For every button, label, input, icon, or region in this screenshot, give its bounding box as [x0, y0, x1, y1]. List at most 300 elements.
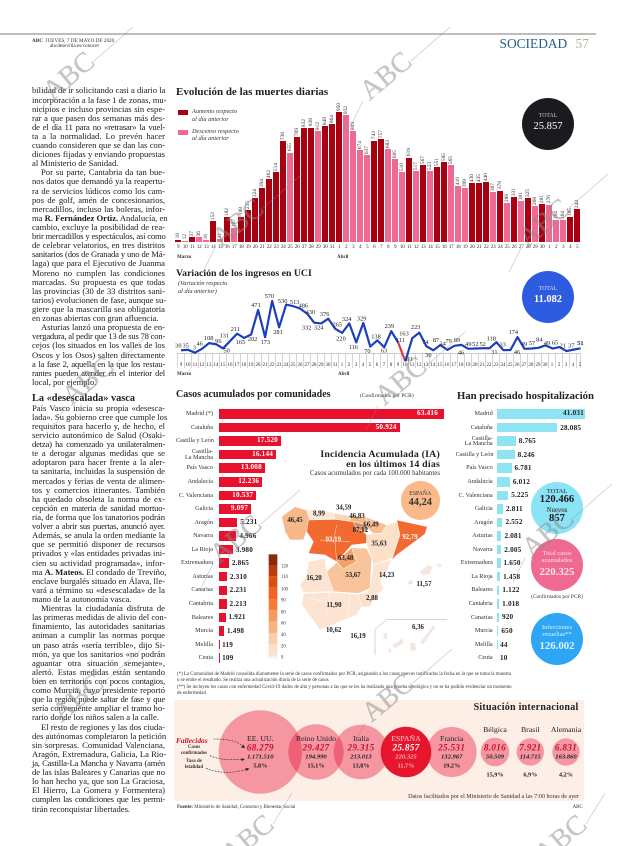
bar chart: cases by region: 10.537: [232, 491, 253, 499]
map values: 34,59: [336, 504, 352, 512]
article text column, part two: cien su actividad programada», infor-: [32, 558, 165, 568]
bar chart: daily deaths: 567: [420, 156, 426, 164]
dateline: abcdesevilla.es/conocer: [50, 43, 99, 49]
bubble labels: 50.509: [486, 754, 505, 760]
article text column, part two: cumplen las condiciones que les permi-: [32, 794, 165, 804]
article text column, part two: alertó. Estas medidas están sentando: [32, 667, 165, 677]
dateline: ABC JUEVES, 7 DE MAYO DE 2020: [32, 38, 114, 44]
ICU value labels: 486: [299, 302, 308, 310]
bar chart: daily deaths: 757: [378, 130, 384, 138]
bar chart: cases by region: 63.416: [417, 409, 438, 417]
bar chart: cases by region: Andalucía: [188, 478, 213, 485]
bar chart: daily deaths: 812: [315, 122, 321, 130]
bubble labels: 6.831: [555, 743, 577, 753]
date axis: ICU admissions: 30: [326, 363, 330, 368]
bar chart: daily deaths: 244: [574, 200, 580, 208]
legend: deceased: Fallecidos: [176, 736, 208, 744]
bar chart: daily deaths: 655: [287, 143, 293, 152]
ICU value labels: 223: [411, 324, 420, 331]
bar chart: daily deaths: 164: [560, 211, 566, 219]
article text column, part one: local, por ejemplo.: [32, 377, 96, 387]
ICU value labels: 52: [472, 341, 478, 348]
date axis: daily deaths: 19: [246, 245, 251, 250]
date axis: daily deaths: 4: [359, 245, 362, 250]
panel: international situation: [174, 700, 584, 801]
date axis: daily deaths: 28: [526, 245, 531, 250]
date axis: ICU admissions: 6: [376, 363, 378, 368]
map values: [287, 504, 432, 640]
date axis: daily deaths: 17: [449, 245, 454, 250]
map values: 10,62: [326, 627, 342, 634]
article text column, part two: te a derogar algunas medidas que se: [32, 448, 165, 458]
date axis: ICU admissions: 17: [452, 363, 456, 368]
article text column, part one: de celebrar velatorios, en tres distritos: [32, 240, 165, 250]
bar chart: daily deaths: 152: [210, 212, 216, 220]
bubble labels: Alemania: [551, 725, 582, 734]
date axis: ICU admissions: 24: [501, 363, 505, 368]
article text column, part two: cepción en materia de sanidad mortuo-: [32, 503, 165, 513]
article text column, part one: sanitarios (dos de Granada y uno de Má-: [32, 249, 165, 259]
map values: 92,79: [402, 534, 418, 541]
legend: daily deaths: [178, 108, 239, 142]
ICU value labels: 211: [231, 326, 240, 333]
ICU value labels: 65: [552, 340, 558, 346]
article text column, part two: Aragón, Extremadura, Galicia, La Rio-: [32, 749, 166, 759]
ICU value labels: 3: [193, 344, 196, 352]
bar chart: daily deaths: 288: [504, 194, 510, 202]
bar chart: hospitalised by region: La Rioja: [471, 573, 493, 580]
footnotes: [177, 671, 512, 696]
date axis: daily deaths: 11: [190, 245, 195, 250]
bubble labels: 1.171.510: [247, 754, 274, 760]
date axis: ICU admissions: 15: [438, 363, 442, 368]
bar chart: daily deaths: 674: [357, 141, 363, 149]
bar chart: daily deaths: 107: [231, 219, 237, 227]
date axis: daily deaths: 20: [253, 245, 258, 250]
ABC watermarks: ABC: [369, 351, 433, 412]
credit: ABC: [573, 804, 583, 810]
bar chart: cases by region: Murcia: [195, 627, 213, 634]
bar chart: cases by region: 4.966: [239, 532, 256, 540]
ICU value labels: 220: [336, 336, 346, 342]
date axis: daily deaths: 7: [380, 245, 383, 250]
total hospitalised circle: TOTAL: [547, 488, 567, 494]
bar chart: cases by region: 13.008: [241, 463, 262, 471]
bar chart: daily deaths: 864: [329, 115, 335, 123]
date axis: daily deaths: 8: [387, 245, 390, 250]
ICU value labels: 63: [381, 348, 387, 354]
map title: [320, 449, 440, 470]
map title: en los últimos 14 días: [346, 459, 440, 470]
ABC watermarks: ABC: [356, 668, 420, 729]
date axis: ICU admissions: 17: [235, 363, 239, 368]
France bubble: [427, 727, 477, 777]
date axis: ICU admissions: 16: [228, 363, 232, 368]
colour scale: 110: [281, 575, 288, 580]
article text column, part one: incorporación a la fase 1 de zonas, mu-: [32, 94, 167, 104]
bubble labels: 25.531: [437, 743, 465, 753]
ABC watermarks: ABC: [206, 193, 270, 254]
article text column, part two: mano de la autonomía vasca.: [32, 594, 132, 604]
legend: fatality rate: Tasa de: [186, 758, 202, 764]
month labels: daily deaths: Marzo: [177, 254, 191, 260]
colour scale: 0: [281, 656, 284, 661]
total hospitalised circle: [531, 482, 583, 534]
total accumulated cases circle: 220.325: [539, 566, 575, 578]
date axis: daily deaths: 5: [366, 245, 369, 250]
heading: cumulative cases: Casos acumulados por comunidades: [176, 388, 331, 400]
bar chart: cases by region: Canarias: [191, 586, 213, 593]
ICU value labels: 324: [342, 316, 352, 323]
date axis: daily deaths: 21: [260, 245, 265, 250]
article text column, part one: a la fase 2, aquella en la que los restau-: [32, 359, 165, 369]
date axis: daily deaths: 14: [211, 245, 216, 250]
article text column, part two: animan a cumplir las normas porque: [32, 630, 165, 640]
date axis: daily deaths: 19: [463, 245, 468, 250]
date axis: ICU admissions: 10: [403, 363, 407, 368]
date axis: daily deaths: 5: [576, 245, 579, 250]
ICU value labels: 74: [422, 339, 429, 346]
date axis: daily deaths: 15: [435, 245, 440, 250]
article text column, part two: [32, 403, 167, 814]
date axis: ICU admissions: 26: [515, 363, 519, 368]
date axis: ICU admissions: 24: [284, 363, 288, 368]
date axis: daily deaths: 28: [309, 245, 314, 250]
date axis: ICU admissions: 11: [410, 363, 414, 368]
date axis: ICU admissions: 19: [249, 363, 253, 368]
ABC watermarks: ABC: [204, 509, 268, 570]
ICU value labels: 31: [491, 349, 497, 356]
bar chart: cases by region: 2.865: [232, 559, 249, 567]
article text column, part one: de el día 11 para no «retrasar» la vuel-: [32, 122, 165, 132]
bubble labels: 15,1%: [307, 762, 325, 770]
article text column, part two: que la región puede saltar de fase y que: [32, 694, 165, 704]
bar chart: daily deaths: 440: [483, 173, 489, 181]
Spain incidence circle: 44,24: [409, 497, 432, 508]
date axis: ICU admissions: 7: [383, 363, 385, 368]
ICU value labels: 174: [509, 329, 519, 336]
total ICU circle: 11.082: [534, 294, 562, 305]
ICU value labels: 30: [425, 352, 431, 359]
article text column, part one: brir mercadillos y espectáculos, así como: [32, 231, 166, 241]
bar chart: hospitalised by region: 10: [500, 654, 508, 662]
date axis: daily deaths: 25: [288, 245, 293, 250]
bar chart: hospitalised by region: 28.085: [560, 424, 581, 432]
article text column, part two: tirán reconquistar libertades.: [32, 804, 130, 814]
total accumulated cases circle: Total casos: [543, 550, 571, 557]
article text column, part two: detza) ha comenzado ya unilateralmen-: [32, 439, 165, 449]
bar chart: hospitalised by region: Asturias: [472, 532, 493, 539]
date axis: ICU admissions: 18: [242, 363, 246, 368]
colour scale: 40: [281, 633, 286, 638]
bar chart: cases by region: 119: [222, 641, 233, 649]
article text column, part one: rar a que pasen dos semanas más des-: [32, 113, 165, 123]
article text column, part two: enclave burgalés situado en Álava, lle-: [32, 576, 165, 586]
bar chart: daily deaths: [175, 103, 580, 242]
bar chart: hospitalised by region: 920: [502, 613, 513, 621]
date axis: daily deaths: 24: [498, 245, 503, 250]
ICU value labels: 46: [458, 350, 464, 356]
bar chart: cases by region: Baleares: [192, 614, 213, 621]
date axis: daily deaths: 27: [519, 245, 524, 250]
ICU value labels: [175, 293, 583, 363]
bar chart: daily deaths: 565: [448, 156, 454, 164]
map values: 35,63: [371, 540, 387, 548]
article text column, part one: Oscos y los Osos) salten directamente: [32, 350, 165, 360]
date axis: daily deaths: 1: [548, 245, 551, 250]
article text column, part two: lo han hecho ya, que son La Graciosa,: [32, 776, 165, 786]
bar chart: daily deaths: 462: [266, 170, 272, 178]
bar chart: hospitalised by region: 1.122: [502, 586, 520, 594]
map values: 11,90: [326, 602, 342, 609]
colour scale: 120: [281, 565, 289, 570]
bar chart: cases by region: Extremadura: [181, 559, 213, 566]
bar chart: cases by region: Castilla-: [192, 448, 213, 455]
date axis: daily deaths: 4: [569, 245, 572, 250]
ABC watermarks: ABC: [516, 503, 580, 564]
Belgium bubble: [481, 738, 509, 766]
bar chart: cases by region: Melilla: [195, 641, 213, 648]
article text column, part one: Asturias lanzó una propuesta de en-: [41, 322, 165, 332]
map subtitle: Casos acumulados por cada 100.000 habitantes: [310, 470, 440, 477]
article text column, part two: País Vasco inicia su propia «desesca-: [32, 403, 165, 413]
ICU value labels: 87: [433, 337, 439, 344]
article text column, part two: aguantar otra situación semejante»,: [32, 658, 165, 668]
article text column, part one: en zonas abiertas con gran afluencia.: [32, 313, 158, 323]
date axis: ICU admissions: 12: [200, 363, 204, 368]
date axis: ICU admissions: 20: [256, 363, 260, 368]
bar chart: daily deaths: 301: [518, 192, 524, 200]
article text column, part two: des autónomas completaron la petición: [32, 731, 166, 741]
article text column, part one: ma R. Fernández Ortiz. Andalucía, en: [32, 213, 168, 223]
bar chart: daily deaths: 37: [189, 231, 195, 236]
ICU value labels: 108: [204, 335, 213, 342]
arrow heads: [241, 744, 250, 771]
bar chart: hospitalised by region: 6.781: [515, 464, 532, 472]
article text column, part one: ta a la normalidad. Lo prevén hacer: [32, 131, 165, 141]
bar chart: hospitalised by region: Castilla y León: [456, 451, 494, 458]
date axis: daily deaths: 13: [421, 245, 426, 250]
bar chart: daily deaths: 950: [336, 103, 342, 111]
date axis: ICU admissions: 9: [180, 363, 182, 368]
header rule: [0, 33, 596, 35]
date axis: ICU admissions: 23: [494, 363, 498, 368]
article text column, part two: servicio autonómico de Salud (Osaki-: [32, 430, 165, 440]
article text column, part two: volver a abrir sus puertas, anunció ayer.: [32, 521, 165, 531]
date axis: daily deaths: 2: [555, 245, 558, 250]
bubble labels: 5,8%: [253, 762, 267, 770]
date axis: daily deaths: 1: [338, 245, 341, 250]
date axis: daily deaths: 10: [183, 245, 188, 250]
ICU value labels: 138: [371, 334, 381, 340]
date axis: daily deaths: 30: [540, 245, 545, 250]
date axis: ICU admissions: 27: [305, 363, 309, 368]
ICU value labels: 570: [265, 293, 274, 300]
bar chart: cases by region: 9.097: [231, 504, 248, 512]
bar chart: hospitalised by region: La Mancha: [465, 440, 493, 447]
legend: confirmed cases: confirmados: [181, 751, 207, 756]
date axis: daily deaths: 12: [414, 245, 419, 250]
ICU value labels: 265: [333, 322, 342, 328]
ICU value labels: 116: [349, 344, 358, 351]
date axis: daily deaths: 29: [533, 245, 538, 250]
ICU value labels: 49: [465, 341, 471, 348]
bar chart: hospitalised by region: 1.458: [503, 573, 520, 581]
colour scale: [269, 554, 289, 661]
bar chart: hospitalised by region: Castilla-: [472, 434, 493, 442]
total deaths circle: TOTAL: [539, 113, 557, 119]
colour scale: 80: [281, 610, 286, 615]
bar chart: daily deaths: 235: [245, 201, 251, 209]
date axis: daily deaths: 9: [177, 245, 180, 250]
US bubble: [219, 710, 302, 794]
bubble labels: 68.279: [247, 743, 274, 753]
bar chart: daily deaths: 276: [546, 195, 552, 204]
total ICU circle: TOTAL: [539, 286, 557, 292]
date axis: daily deaths: 16: [442, 245, 447, 250]
bar chart: daily deaths: 551: [434, 158, 440, 166]
bar chart: hospitalised by region: Galicia: [475, 505, 493, 512]
bar chart: daily deaths: 324: [252, 189, 258, 197]
legend: decrease: al día anterior: [192, 135, 229, 142]
legend: fatality rate: [185, 758, 204, 770]
ICU value labels: 281: [273, 329, 283, 336]
bar chart: hospitalised by region: C. Valenciana: [458, 492, 493, 499]
date axis: daily deaths: 24: [281, 245, 286, 250]
bar chart: hospitalised by region: 2.081: [504, 532, 522, 540]
map values: 11,57: [416, 581, 432, 588]
date axis: ICU admissions: 5: [369, 363, 371, 368]
bar chart: daily deaths: 18: [175, 233, 181, 239]
article text column, part two: privados y «las entidades privadas ini-: [32, 548, 165, 558]
bar chart: hospitalised by region: Andalucía: [467, 478, 493, 485]
article text column, part two: El resto de regiones y las dos ciuda-: [41, 722, 165, 732]
bar chart: daily deaths: 182: [224, 208, 230, 216]
chart axis: [177, 354, 581, 368]
bar chart: daily deaths: 523: [427, 162, 433, 170]
bar chart: cases by region: Ceuta: [199, 654, 213, 661]
bar chart: daily deaths: 394: [259, 179, 265, 187]
ICU value labels: 332: [302, 324, 311, 332]
bar chart: cases by region: 12.236: [238, 477, 259, 485]
bar chart: cases by region: La Rioja: [192, 546, 213, 553]
bar chart: daily deaths: 12: [182, 234, 188, 240]
date axis: ICU admissions: 29: [319, 363, 323, 368]
date axis: ICU admissions: 25: [291, 363, 295, 368]
date axis: ICU admissions: [180, 362, 581, 368]
bar chart: daily deaths: 619: [406, 148, 412, 156]
article text column, part one: rantes pueden atender en el interior del: [32, 368, 165, 378]
month labels: ICU admissions: [177, 372, 350, 377]
bar chart: daily deaths: 21: [217, 233, 223, 238]
article text column, part one: las provincias (30 de 33 distritos sani-: [32, 286, 165, 296]
article text column, part one: giere que la mascarilla sea obligatoria: [32, 304, 165, 314]
article text column, part two: ha quedado obsoleta la norma de ex-: [32, 494, 165, 504]
bar chart: daily deaths: 325: [525, 189, 531, 197]
ICU value labels: 513: [290, 299, 299, 306]
bar chart: hospitalised by region: [456, 409, 585, 662]
date axis: ICU admissions: 14: [431, 363, 435, 368]
article text column, part two: las primeras medidas de alivio del con-: [32, 612, 167, 622]
bar chart: daily deaths: 164: [553, 211, 559, 219]
total hospitalised circle: Nuevos: [547, 506, 567, 514]
footnotes: o se emite el resultado. Se realiza una actualización diaria de la serie de casos (**) Se incluyen los casos con enfermedad Covid-19 dados de alta y personas a las que se les ha realizado una prueba serológica y no se ha podido evidenciar un momento: [177, 678, 512, 690]
bar chart: hospitalised by region: 1.018: [502, 600, 519, 608]
bar chart: daily deaths: 430: [469, 174, 475, 182]
choropleth map of Spain: [268, 504, 447, 661]
ICU value labels: 49: [544, 340, 550, 347]
ICU value labels: 96: [215, 338, 221, 345]
date axis: ICU admissions: 20: [473, 363, 477, 368]
ICU value labels: 51: [577, 340, 583, 347]
bar chart: hospitalised by region: Cataluña: [471, 424, 493, 431]
date axis: ICU admissions: 15: [221, 363, 225, 368]
bar chart: daily deaths: 769: [294, 128, 300, 136]
bar chart: hospitalised by region: 6.012: [513, 478, 530, 486]
bubble labels: 6,9%: [523, 772, 537, 778]
date axis: ICU admissions: 27: [522, 363, 526, 368]
date axis: ICU admissions: 28: [529, 363, 533, 368]
ICU value labels: 530: [278, 298, 287, 305]
ICU value labels: 46: [197, 340, 203, 348]
bar chart: cases by region: Castilla y León: [176, 437, 214, 444]
date axis: ICU admissions: 2: [348, 363, 350, 368]
ICU value labels: 111: [396, 337, 405, 344]
bar chart: daily deaths: 268: [532, 196, 538, 205]
article text column, part one: cejos (los situados en los valles de los: [32, 340, 165, 350]
bar chart: cases by region: Cantabria: [189, 600, 213, 607]
dashed legend arrows: [206, 739, 248, 772]
international title: Situación internacional: [474, 702, 578, 712]
bar chart: daily deaths: 838: [308, 118, 314, 126]
heading: hospitalisation: Han precisado hospitalización: [457, 390, 594, 402]
bar chart: hospitalised by region: Ceuta: [478, 654, 493, 661]
date axis: daily deaths: 6: [373, 245, 376, 250]
bar chart: hospitalised by region: Navarra: [473, 546, 493, 553]
date axis: daily deaths: 14: [428, 245, 433, 250]
map values: 6,36: [412, 624, 425, 631]
bar chart: hospitalised by region: Baleares: [471, 586, 493, 593]
article text column, part two: requisitos para hacerlo y, de hecho, el: [32, 421, 165, 431]
ICU value labels: 57: [529, 340, 535, 347]
bar chart: cases by region: Galicia: [195, 505, 213, 512]
date axis: daily deaths: 31: [330, 245, 335, 250]
bar chart: daily deaths: 743: [371, 131, 377, 140]
date axis: ICU admissions: 3: [355, 363, 357, 368]
bar chart: daily deaths: 585: [441, 153, 447, 161]
ICU value labels: 173: [261, 339, 270, 346]
date axis: ICU admissions: 13: [207, 363, 211, 368]
ICU value labels: 49: [521, 341, 527, 348]
bar chart: cases by region: País Vasco: [186, 464, 213, 471]
bar chart: cases by region: 5.231: [240, 518, 257, 526]
heading: ICU admissions: Variación de los ingresos en UCI: [176, 268, 312, 278]
resolved infections circle: Infecciones: [542, 624, 572, 630]
article text column, part two: rario donde los niños salen a la calle.: [32, 712, 159, 722]
UK bubble: [288, 724, 344, 780]
article text column, part one: laga) que para el Ejecutivo de Juanma: [32, 258, 165, 268]
total hospitalised circle: 857: [549, 512, 565, 524]
ICU value labels: 165: [236, 339, 245, 346]
bar chart: cases by region: 16.144: [252, 450, 273, 458]
total deaths circle: 25.857: [533, 121, 563, 132]
bubble labels: 194.990: [305, 754, 327, 760]
date axis: daily deaths: 22: [484, 245, 489, 250]
section title: SOCIEDAD 57: [500, 36, 589, 51]
date axis: daily deaths: [177, 244, 579, 250]
bar chart: daily deaths: 849: [322, 117, 328, 125]
ICU value labels: 324: [314, 324, 324, 332]
